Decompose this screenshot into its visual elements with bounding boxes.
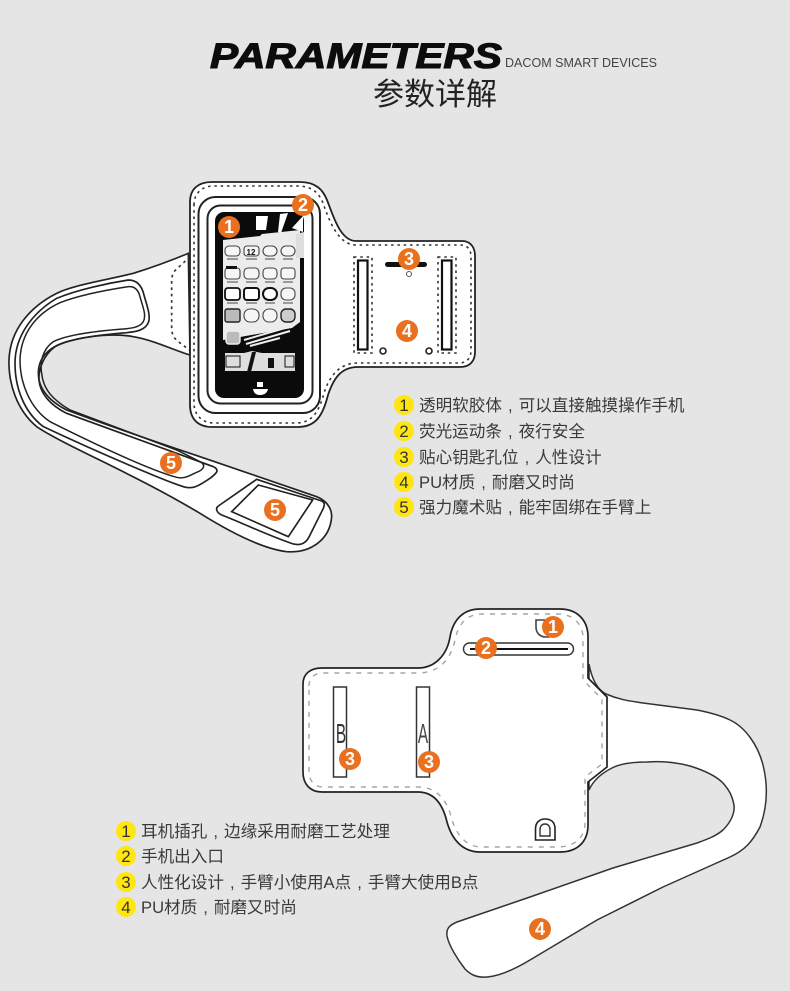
back legend: 1: [121, 822, 131, 841]
front legend: 1: [399, 396, 409, 415]
front badge 2: 2: [298, 195, 308, 215]
front badge 5 strap: [160, 452, 182, 474]
front badge 3: [398, 248, 420, 270]
title: 参数详解: [373, 77, 497, 112]
front legend: 贴心钥匙孔位 , 人性设计: [419, 448, 602, 467]
back badge 1: [542, 616, 564, 638]
back stitching: [309, 614, 602, 847]
front legend: 5: [399, 498, 409, 517]
front badge 5 patch: 5: [270, 500, 280, 520]
front legend: 透明软胶体 , 可以直接触摸操作手机: [419, 396, 685, 415]
back badge 2: [475, 637, 497, 659]
back legend: 4: [121, 898, 131, 917]
small eyelets: [380, 272, 432, 354]
back legend: 3: [121, 873, 131, 892]
back legend: 耳机插孔 , 边缘采用耐磨工艺处理: [141, 822, 390, 841]
slot B: [334, 687, 346, 777]
back badge 4: [529, 918, 551, 940]
back badge 3 A: 3: [424, 752, 434, 772]
front badge 5 patch: [264, 499, 286, 521]
back legend: 2: [121, 847, 131, 866]
front badge 3: 3: [404, 249, 414, 269]
front badge 2: [292, 194, 314, 216]
front legend: 4: [399, 473, 409, 492]
title: DACOM SMART DEVICES: [505, 55, 657, 70]
home button: [253, 382, 268, 395]
back strap: [447, 664, 766, 977]
back badge 3 A: [418, 751, 440, 773]
back legend: PU材质 , 耐磨又时尚: [141, 898, 297, 917]
stitching: [194, 186, 471, 423]
slot B: B: [336, 718, 346, 749]
front badge 4: 4: [402, 321, 412, 341]
front legend: 3: [399, 448, 409, 467]
back armband illustration: [303, 609, 766, 977]
front badge 5 strap: 5: [166, 453, 176, 473]
back legend: 手机出入口: [141, 847, 224, 866]
phone exit slot: [464, 643, 574, 655]
front legend: 强力魔术贴 , 能牢固绑在手臂上: [419, 498, 651, 517]
front badge 1: [218, 216, 240, 238]
back badge 3 B: [339, 748, 361, 770]
back badge 3 B: 3: [345, 749, 355, 769]
lower port: [536, 819, 555, 840]
velcro patch: [217, 479, 324, 545]
slot A: [416, 687, 430, 777]
key hole: [385, 262, 427, 267]
app icons: [225, 246, 295, 372]
back badge 1: 1: [548, 617, 558, 637]
front badge 1: 1: [224, 217, 234, 237]
front legend: [394, 395, 685, 517]
front pouch body: [190, 182, 475, 427]
front legend: 荧光运动条 , 夜行安全: [419, 422, 585, 441]
back badge 2: 2: [481, 638, 491, 658]
slot A: A: [418, 718, 429, 749]
outer phone rings: [198, 197, 320, 413]
back pouch body: [303, 609, 607, 852]
front legend: 2: [399, 422, 409, 441]
phone: [215, 212, 304, 398]
front armband illustration: [9, 182, 475, 552]
earphone hole: [536, 620, 549, 637]
title: [210, 37, 657, 112]
app icons: 12: [247, 248, 256, 257]
arm slots: [354, 257, 456, 353]
back legend: 人性化设计 , 手臂小使用A点 , 手臂大使用B点: [141, 873, 478, 892]
front badge 4: [396, 320, 418, 342]
back legend: [116, 821, 478, 917]
back badge 4: 4: [535, 919, 545, 939]
front strap: [9, 253, 332, 552]
front legend: PU材质 , 耐磨又时尚: [419, 473, 575, 492]
title: PARAMETERS: [210, 37, 502, 76]
